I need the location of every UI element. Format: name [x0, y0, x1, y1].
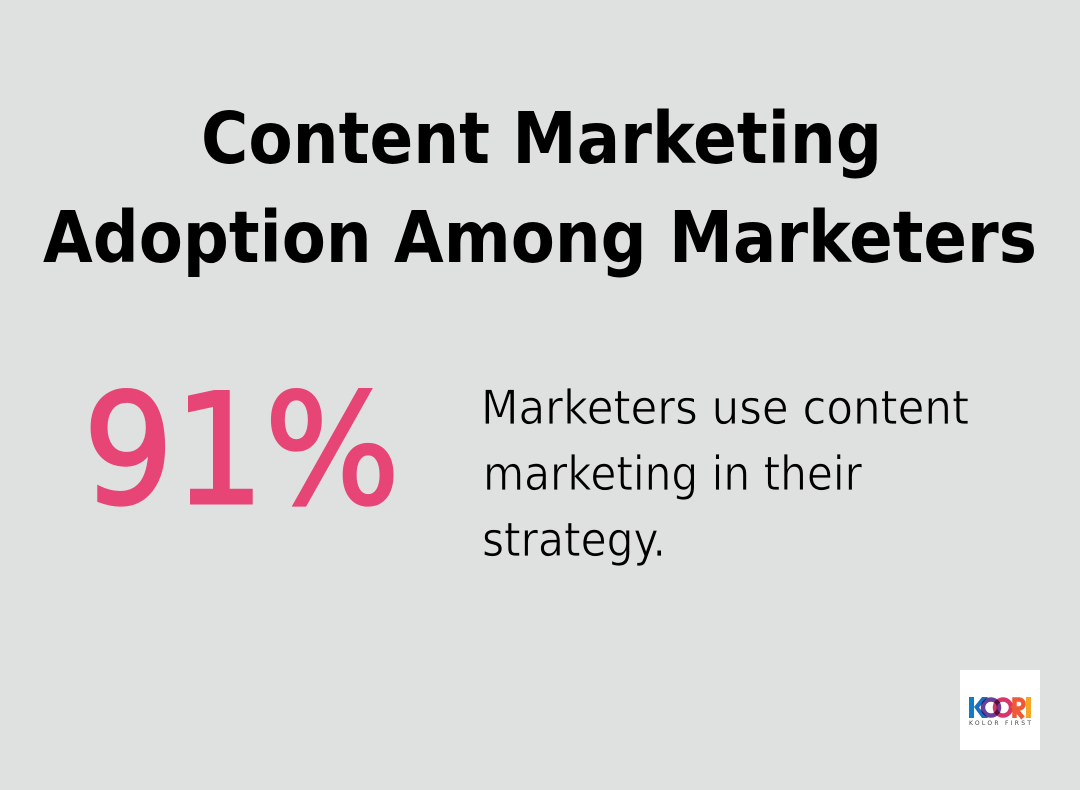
description text: strategy. — [482, 513, 666, 568]
description text: Marketers use content — [481, 381, 969, 436]
description text: marketing in their — [483, 447, 863, 502]
description text — [481, 381, 969, 568]
title — [43, 97, 1037, 279]
logo mark: KOOR1 — [969, 697, 1031, 718]
title: Content Marketing — [201, 97, 882, 180]
logo badge — [960, 670, 1040, 750]
logo tagline: KOLOR FIRST — [969, 720, 1031, 727]
statistic: 91%: 91% — [83, 362, 400, 540]
